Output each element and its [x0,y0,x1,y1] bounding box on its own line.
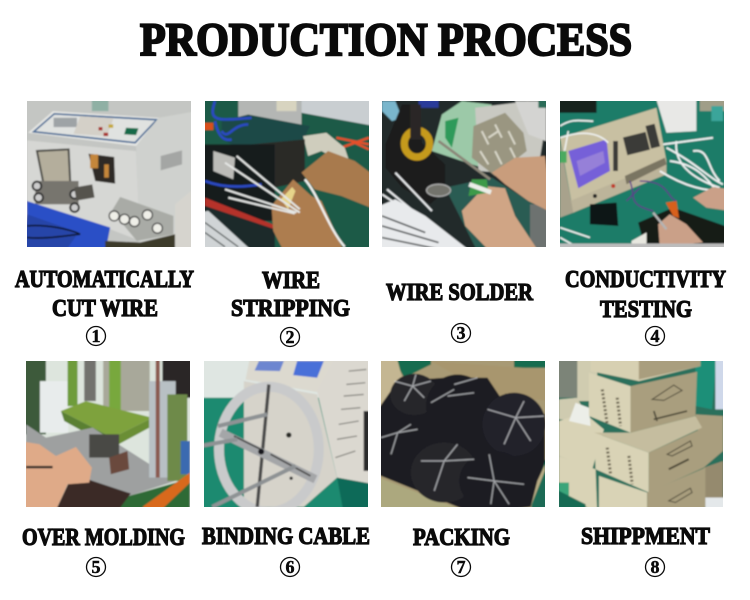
step number 4 [646,326,664,346]
photo: stacked shipping cartons [559,361,723,507]
photo: conductivity tester [560,101,724,247]
label [15,267,194,322]
label: AUTOMATICALLY [15,267,194,293]
panel: step 4 conductivity testing [553,94,731,346]
label [565,267,726,323]
photo: wire cutting machine [27,101,191,247]
panel: step 3 wire solder [375,94,553,343]
label: SHIPPMENT [581,524,710,550]
step number 5: 5 [92,557,100,577]
step number 3: 3 [456,323,466,343]
label: CUT WIRE [52,296,158,322]
step number 6 [280,557,300,577]
step number 1 [86,326,106,346]
title: PRODUCTION PROCESS [140,14,632,66]
step number 3 [452,323,470,343]
photo: cables bagged in a carton [381,361,545,507]
panel: step 8 shippment [552,354,730,577]
step number 7: 7 [456,557,466,577]
step number 7 [452,557,470,577]
panel: step 5 over molding [19,354,197,577]
label: WIRE SOLDER [386,280,534,306]
label: BINDING CABLE [202,524,370,550]
step number 8 [646,557,664,577]
photo: cable binding machine [204,361,368,507]
label: WIRE [262,268,320,294]
step number 6: 6 [286,557,294,577]
label: STRIPPING [231,296,350,322]
step number 8: 8 [650,557,660,577]
label: PACKING [413,525,510,551]
label: TESTING [600,297,692,323]
step number 1: 1 [92,326,100,346]
label [231,268,350,322]
step number 5 [86,557,106,577]
label: OVER MOLDING [22,525,185,551]
panel: step 2 wire stripping [198,94,376,347]
panel: step 1 automatically cut wire [15,94,198,346]
panel: step 7 packing [374,354,552,577]
step number 2: 2 [286,327,294,347]
label: CONDUCTIVITY [565,267,726,293]
photo: hands soldering wire [382,101,546,247]
photo: over molding press [26,361,190,507]
step number 4: 4 [650,326,660,346]
panel: step 6 binding cable [197,354,375,577]
photo: hands stripping wire [205,101,369,247]
step number 2 [280,327,300,347]
